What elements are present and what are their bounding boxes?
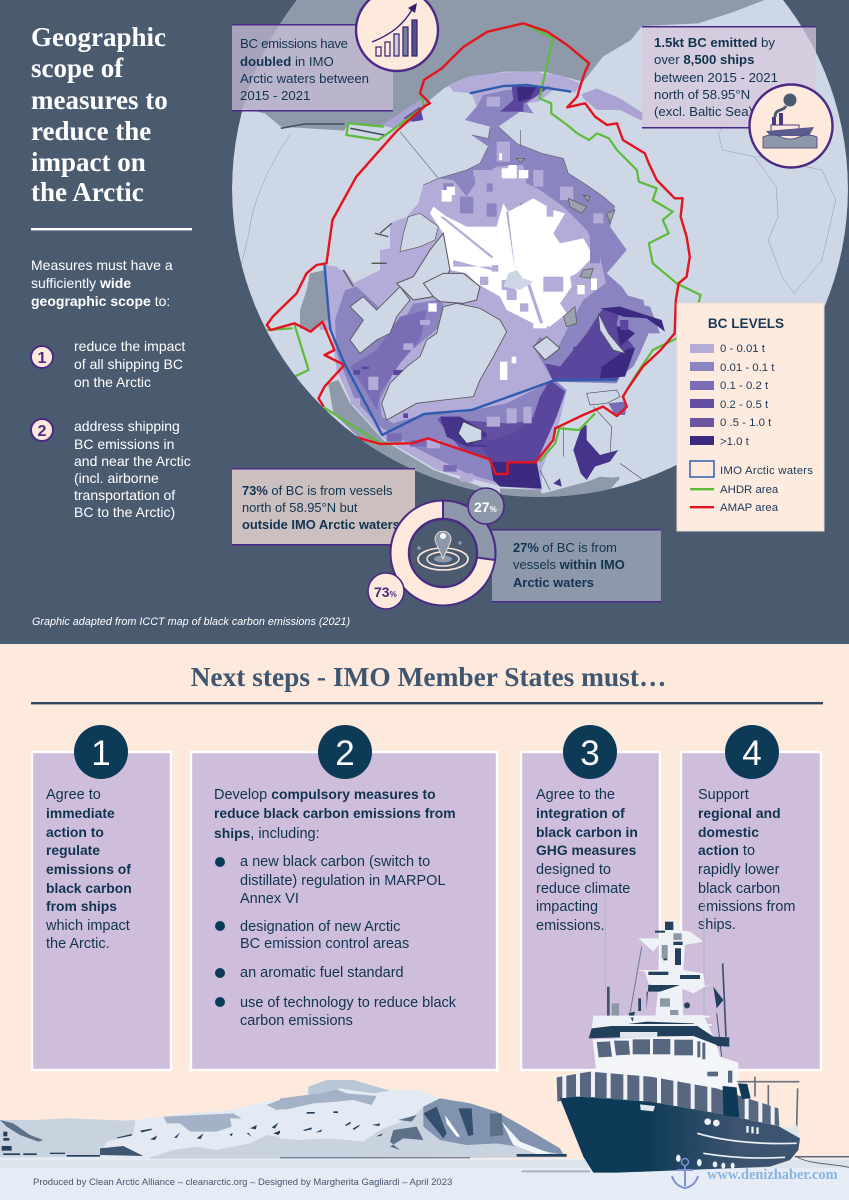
- card 1: which impact: [45, 918, 130, 934]
- card 3: 3: [580, 734, 600, 773]
- card 2: reduce black carbon emissions from: [214, 805, 456, 821]
- card 1: regulate: [46, 842, 100, 858]
- map: Bering darkest: [517, 87, 537, 102]
- callout: 73 percent: 73% of BC is from vessels: [242, 483, 392, 498]
- ship: masts and rigging: [605, 893, 726, 1057]
- ship: hull: [560, 1097, 800, 1173]
- title: Geographic: [31, 22, 166, 52]
- background: lower peach panel: [0, 644, 849, 1200]
- map: Pechora darkest: [617, 327, 635, 347]
- map: grey lower crescent: [328, 380, 620, 497]
- legend: IMO Arctic waters: [720, 465, 813, 477]
- card 4: black carbon: [698, 881, 780, 897]
- card 3: black carbon in: [536, 824, 638, 840]
- ship: tow line: [795, 1156, 849, 1167]
- point 2: (incl. airborne: [74, 470, 159, 486]
- card 2: Develop compulsory measures to: [214, 786, 436, 803]
- icon: ship with smoke: [750, 84, 832, 168]
- map: grey Baltic land: [583, 477, 620, 500]
- map: Arctic Ocean fills: [315, 72, 660, 333]
- map: Barents dark: [545, 307, 635, 382]
- map: Kola land: [587, 390, 620, 405]
- map: Baltic Sea: [573, 425, 618, 480]
- map: Siberian mid band: [438, 127, 660, 333]
- card 1: the Arctic.: [46, 936, 110, 952]
- map: Barents and Kara mid: [533, 280, 650, 383]
- map: Hudson Bay lavender: [318, 265, 340, 330]
- footer credit: Produced by Clean Arctic Alliance – cleanarctic.org – Designed by Margherita Gagliardi – April 2023: [33, 1177, 452, 1188]
- background: upper slate panel: [0, 0, 849, 644]
- card 3: integration of: [536, 805, 625, 821]
- map: Siberian and pole-side lavender: [390, 127, 633, 333]
- card 4: emissions from: [698, 899, 796, 915]
- map: Baffin Island: [350, 287, 410, 353]
- point 2: address shipping: [74, 418, 180, 434]
- card 1: emissions of: [46, 861, 131, 877]
- callout: 27 percent: 27% of BC is from: [513, 540, 617, 555]
- legend: AMAP area: [720, 502, 779, 514]
- map: Ellesmere Island: [423, 273, 480, 303]
- map: dark shore: [423, 127, 615, 207]
- illustration: ship: [522, 893, 849, 1173]
- map: Alaska arc dark: [403, 107, 423, 122]
- map: Victoria Island: [397, 233, 450, 300]
- map: Baffin Bay mid: [416, 300, 442, 304]
- ship: deck rail: [593, 1017, 712, 1025]
- bullet list: use of technology to reduce black: [240, 995, 457, 1011]
- ship: windows: [597, 1039, 732, 1083]
- map: borders: [540, 407, 643, 490]
- card 2: [191, 725, 497, 1070]
- line: AHDR area: [267, 23, 701, 462]
- point 1: on the Arctic: [74, 374, 151, 390]
- map: lavender rays and cells over pole: [440, 207, 565, 323]
- card 1: Agree to: [46, 787, 101, 803]
- callout: emissions doubled: Arctic waters between: [240, 71, 369, 86]
- map: Canadian channels: [354, 246, 462, 306]
- ship: mast tower detail: [593, 920, 723, 1025]
- card 4: action to: [698, 842, 755, 859]
- legend: 0.01 - 0.1 t: [720, 362, 775, 374]
- line: AMAP area: [267, 23, 690, 474]
- ship: upper deck: [592, 1015, 713, 1037]
- intro text: Measures must have a: [31, 257, 173, 273]
- bullet list: an aromatic fuel standard: [240, 965, 404, 981]
- title: reduce the: [31, 116, 151, 146]
- intro text: geographic scope to:: [31, 293, 170, 309]
- map: band and lavender blocks: [473, 72, 603, 223]
- map: Hudson Bay mid: [330, 283, 350, 330]
- callout: 73 percent: outside IMO Arctic waters: [242, 517, 400, 532]
- card 3: designed to: [536, 862, 611, 878]
- map: east Greenland lavender: [506, 333, 564, 346]
- map: Norwegian Sea dark: [480, 380, 565, 462]
- legend: BC LEVELS: [708, 316, 784, 331]
- ship: tower flecks: [628, 922, 723, 1022]
- point 2: BC emissions in: [74, 436, 174, 452]
- map: Atlantic mid dark: [437, 418, 526, 458]
- card 3: Agree to the: [536, 787, 615, 803]
- donut chart: share of BC: [390, 500, 496, 606]
- point 2: and near the Arctic: [74, 453, 191, 469]
- map: Bering mid: [465, 90, 534, 127]
- map: Bering dark: [500, 87, 550, 112]
- card 2: ships, including:: [214, 825, 320, 842]
- watermark: www.denizhaber.com: [707, 1167, 838, 1183]
- legend: 0 - 0.01 t: [720, 343, 766, 355]
- callout: emissions doubled: doubled in IMO: [240, 54, 334, 69]
- bullet list: a new black carbon (switch to: [240, 854, 430, 870]
- title: the Arctic: [31, 177, 144, 207]
- map: white cells: [442, 153, 597, 294]
- ship: bulwark: [557, 1072, 779, 1126]
- point 2: 2: [38, 423, 47, 440]
- ship: hull details: [676, 1118, 759, 1169]
- card 1: [32, 725, 171, 1070]
- map: North Sea darkest: [490, 462, 542, 488]
- callout: ships emitting BC: 1.5kt BC emitted by: [654, 35, 775, 50]
- point 1: [31, 338, 185, 390]
- map: graticule: [400, 130, 521, 178]
- callout: emissions doubled: [232, 24, 393, 112]
- card 3: impacting: [536, 899, 598, 915]
- map: bottom ring cells: [387, 433, 457, 472]
- bullet list: [215, 854, 457, 1029]
- card 4: 4: [742, 734, 762, 773]
- card 1: black carbon: [46, 880, 132, 896]
- title: measures to: [31, 85, 168, 115]
- badge: 73 percent: 73%: [374, 584, 397, 600]
- callout: 73 percent: [232, 468, 415, 546]
- illustration: snowy mountain west: [0, 1097, 300, 1159]
- card 2: 2: [335, 734, 355, 773]
- bullet list: distillate) regulation in MARPOL: [240, 873, 446, 889]
- callout: emissions doubled: BC emissions have: [240, 36, 348, 51]
- card 4: [681, 725, 821, 1070]
- ship: white superstructure: [593, 1036, 738, 1097]
- callout: ships emitting BC: over 8,500 ships: [654, 52, 754, 67]
- point 2: BC to the Arctic): [74, 504, 175, 520]
- point 1: reduce the impact: [74, 338, 185, 354]
- map: east arc: [582, 88, 643, 121]
- card 4: Support: [698, 787, 749, 803]
- card 3: reduce climate: [536, 881, 630, 897]
- callout: ships emitting BC: between 2015 - 2021: [654, 70, 778, 85]
- card 3: emissions.: [536, 918, 604, 934]
- map: Hudson grey land: [300, 270, 329, 330]
- card 1: 1: [91, 734, 111, 773]
- point 2: [31, 418, 191, 520]
- card 1: immediate: [46, 805, 115, 821]
- intro text: sufficiently wide: [31, 275, 131, 291]
- card 4: regional and: [698, 805, 781, 821]
- title: scope of: [31, 53, 124, 83]
- map: North pole marker: [503, 270, 533, 290]
- legend: AHDR area: [720, 484, 779, 496]
- point 1: of all shipping BC: [74, 356, 183, 372]
- ship: rear frame: [737, 1077, 799, 1127]
- card 1: action to: [46, 824, 104, 840]
- badge: 27 percent: [468, 488, 504, 524]
- map: Arctic land and islands: [343, 70, 643, 327]
- map: Kattegat dark: [553, 478, 562, 487]
- legend: [677, 303, 824, 531]
- map: Ob gulf dark: [600, 307, 665, 332]
- ship: navy roof: [589, 1022, 729, 1047]
- bullet list: BC emission control areas: [240, 936, 409, 952]
- map: white pole zone: [430, 198, 590, 327]
- heading: next steps: Next steps - IMO Member States must…: [191, 662, 666, 692]
- point 2: transportation of: [74, 487, 175, 503]
- card 3: GHG measures: [536, 842, 637, 858]
- map: North Atlantic and Barents sea: [300, 270, 665, 513]
- legend: 0.2 - 0.5 t: [720, 399, 769, 411]
- callout: 27 percent: vessels within IMO: [513, 557, 625, 572]
- map: Bering strait land: [577, 70, 613, 93]
- callout: emissions doubled: 2015 - 2021: [240, 88, 310, 103]
- map: Novaya Zemlya: [598, 313, 625, 353]
- card 3: [521, 725, 660, 1070]
- card 4: rapidly lower: [698, 862, 780, 878]
- map: Alaska arc: [382, 100, 427, 128]
- ship: tower grey patches: [612, 933, 682, 1017]
- map: grey north European land: [500, 488, 543, 497]
- caption: source: Graphic adapted from ICCT map of black carbon emissions (2021): [32, 616, 350, 628]
- callout: 27 percent: [492, 529, 661, 602]
- map: lines group: [241, 23, 836, 474]
- card 4: ships.: [698, 917, 736, 933]
- watermark: [672, 1158, 838, 1188]
- legend: >1.0 t: [720, 436, 750, 448]
- icon: rising bar chart: [356, 0, 438, 71]
- bullet list: designation of new Arctic: [240, 919, 400, 935]
- map: mid cells near pole: [443, 177, 600, 263]
- bullet list: Annex VI: [240, 891, 299, 907]
- map: Banks Island: [400, 213, 438, 252]
- map: Baffin Bay white cells: [428, 303, 547, 380]
- map: Iceland shelf dark: [440, 417, 487, 447]
- bullet list: carbon emissions: [240, 1013, 353, 1029]
- intro text: [31, 257, 173, 309]
- map: darker Labrador shelf: [350, 310, 427, 410]
- map: Gulf of Finland edge: [608, 402, 627, 415]
- card 4: domestic: [698, 824, 759, 840]
- map: Barents darkest: [600, 348, 635, 378]
- illustration: snowy mountain east: [280, 1080, 567, 1159]
- map: Arctic black carbon emissions: [205, 0, 848, 513]
- badge: 73 percent: [368, 573, 404, 609]
- map: Atlantic pixel cells: [350, 320, 532, 482]
- map: dark cells: [353, 320, 628, 445]
- callout: 27 percent: Arctic waters: [513, 575, 594, 590]
- callout: ships emitting BC: [642, 26, 816, 128]
- map: Svalbard: [533, 337, 560, 360]
- icon: location pin: [417, 531, 468, 570]
- callout: ships emitting BC: north of 58.95°N: [654, 87, 750, 102]
- legend: 0 .5 - 1.0 t: [720, 417, 772, 429]
- illustration: ice foreground: [0, 1159, 849, 1200]
- point 1: 1: [38, 350, 47, 367]
- map: Greenland: [382, 303, 507, 420]
- badge: 27 percent: 27%: [474, 499, 497, 515]
- line: IMO Arctic waters: [324, 85, 617, 435]
- map: Bering band: [448, 72, 582, 123]
- map: small Arctic islands: [517, 158, 615, 327]
- map: borders and graticule: [241, 100, 836, 293]
- map: grey land at top: [205, 0, 782, 135]
- map: outer lavender ring: [325, 270, 567, 491]
- map: mid emissions Labrador and Atlantic: [335, 287, 567, 490]
- legend: 0.1 - 0.2 t: [720, 380, 769, 392]
- title: [31, 22, 168, 207]
- map: north-west Canada land shore: [343, 223, 392, 287]
- callout: 73 percent: north of 58.95°N but: [242, 500, 358, 515]
- title: impact on: [31, 147, 146, 177]
- map: Iceland: [458, 422, 482, 443]
- horizon line right of ship: [795, 1156, 849, 1158]
- card 1: from ships: [46, 898, 117, 914]
- callout: ships emitting BC: (excl. Baltic Sea): [654, 104, 753, 119]
